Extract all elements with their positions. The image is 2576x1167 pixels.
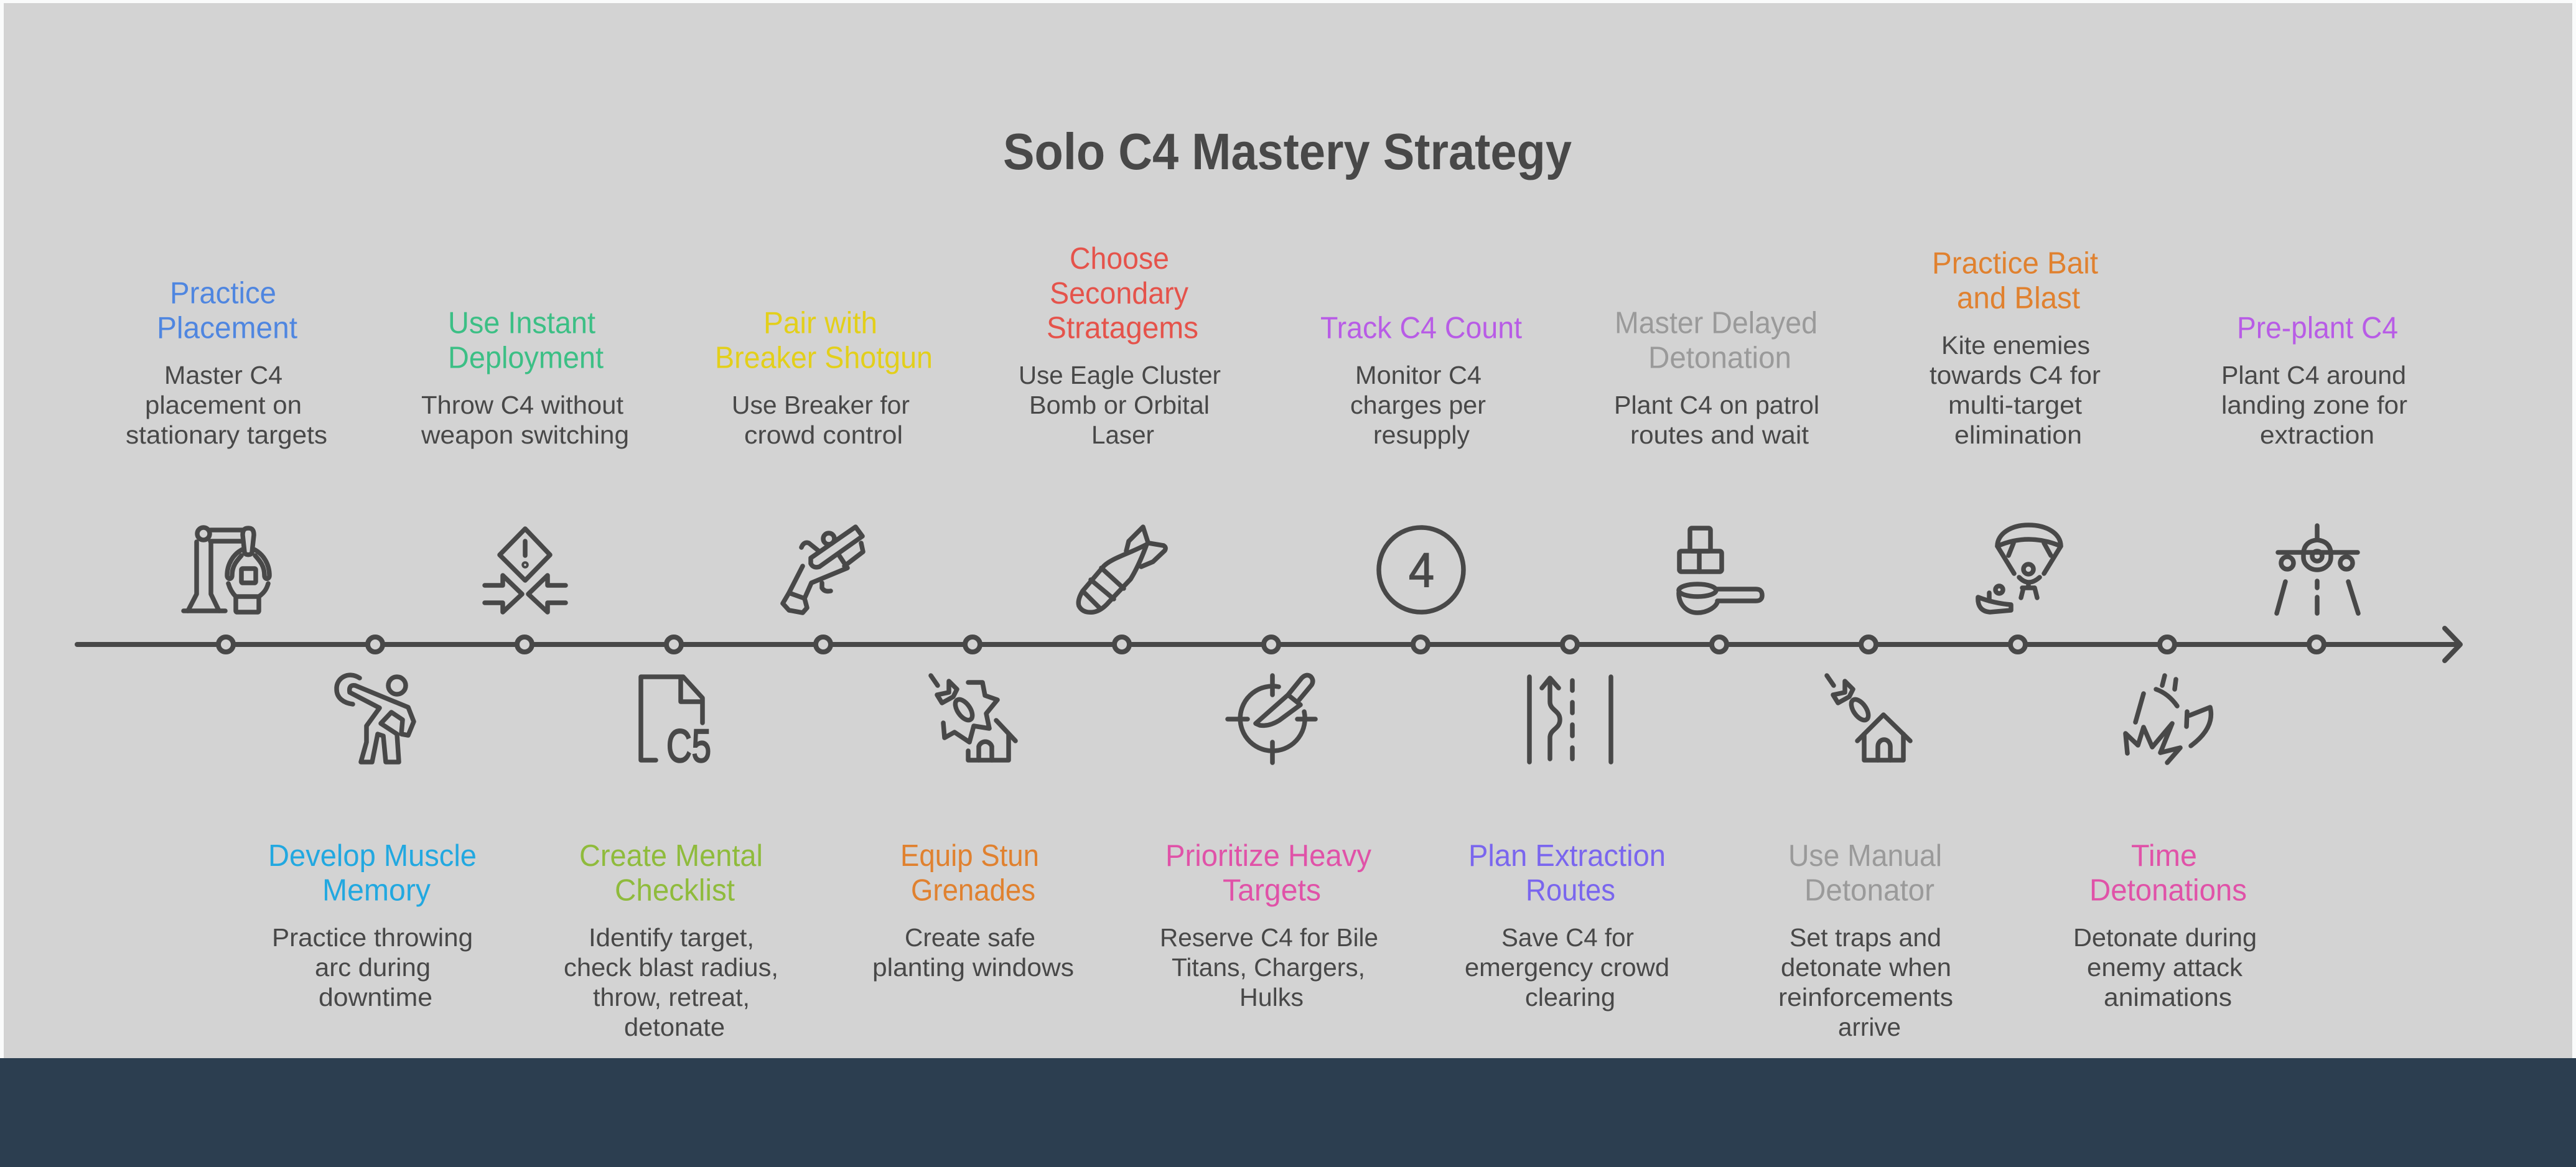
description: Equip Stun Grenades: planting windows: [872, 953, 1074, 982]
icon: circled number 4: [1379, 528, 1463, 612]
description: Create Mental Checklist: check blast radius,: [564, 953, 778, 982]
description: Time Detonations: enemy attack: [2087, 953, 2243, 982]
description: Practice Placement: Master C4: [164, 361, 282, 389]
heading: Plan Extraction Routes: Routes: [1526, 873, 1615, 907]
description: Pre-plant C4: Plant C4 around: [2221, 361, 2406, 389]
icon: C5 document: [641, 677, 711, 772]
heading: Prioritize Heavy Targets: Targets: [1223, 873, 1321, 907]
step: Practice Placement: [126, 276, 327, 612]
heading: Use Instant Deployment: Deployment: [448, 341, 604, 374]
heading: Use Manual Detonator: Detonator: [1804, 873, 1934, 907]
step: Pre-plant C4: [2221, 311, 2407, 613]
heading: Pre-plant C4: Pre-plant C4: [2237, 311, 2398, 345]
heading: Equip Stun Grenades: Equip Stun: [900, 839, 1039, 873]
description: Use Instant Deployment: weapon switching: [421, 421, 629, 449]
step: Prioritize Heavy Targets: [1160, 675, 1378, 1011]
icon: bomb over house: [1827, 676, 1910, 760]
description: Pre-plant C4: landing zone for: [2221, 391, 2407, 419]
heading: Master Delayed Detonation: Master Delayed: [1615, 306, 1818, 340]
heading: Time Detonations: Detonations: [2089, 873, 2247, 907]
description: Equip Stun Grenades: [872, 923, 1074, 982]
heading: Pair with Breaker Shotgun: [715, 306, 933, 374]
icon: aerial bomb: [1078, 527, 1165, 612]
heading: Prioritize Heavy Targets: Prioritize Heavy: [1165, 839, 1371, 873]
heading: Practice Placement: [157, 276, 297, 345]
title: Solo C4 Mastery Strategy: [1003, 123, 1572, 180]
heading: Use Instant Deployment: Use Instant: [448, 306, 595, 340]
description: Prioritize Heavy Targets: Reserve C4 for Bile: [1160, 923, 1378, 952]
icon: bomb burst on house: [931, 676, 1015, 760]
description: Pair with Breaker Shotgun: crowd control: [744, 421, 903, 449]
icon: explosion and claw: [2126, 676, 2211, 763]
description: Practice Bait and Blast: elimination: [1954, 421, 2082, 449]
icon: warning diamond with converging arrows: [485, 529, 566, 612]
description: Practice Bait and Blast: Kite enemies: [1941, 331, 2090, 360]
description: Pair with Breaker Shotgun: Use Breaker for: [732, 391, 910, 419]
description: Pre-plant C4: extraction: [2260, 421, 2374, 449]
description: Create Mental Checklist: throw, retreat,: [593, 983, 750, 1011]
step: Choose Secondary Stratagems: [1019, 242, 1221, 612]
step: Master Delayed Detonation: [1614, 306, 1819, 613]
description: Practice Bait and Blast: multi-target: [1948, 391, 2083, 419]
step: Plan Extraction Routes: [1465, 677, 1669, 1011]
heading: Equip Stun Grenades: Grenades: [911, 873, 1035, 907]
description: Track C4 Count: charges per: [1350, 391, 1486, 419]
description: Plan Extraction Routes: clearing: [1525, 983, 1615, 1011]
heading: Pair with Breaker Shotgun: Pair with: [763, 306, 877, 340]
icon: robot arm: [184, 528, 269, 612]
description: Master Delayed Detonation: routes and wait: [1630, 421, 1809, 449]
description: Choose Secondary Stratagems: Laser: [1091, 421, 1154, 449]
icon: road with route arrow: [1529, 677, 1611, 762]
icon: aircraft over runway: [2277, 526, 2358, 613]
description: Use Manual Detonator: reinforcements: [1778, 983, 1953, 1011]
description: Time Detonations: Detonate during: [2073, 923, 2257, 952]
heading: Track C4 Count: Track C4 Count: [1320, 311, 1522, 345]
description: Prioritize Heavy Targets: Hulks: [1239, 983, 1304, 1011]
step: Practice Bait and Blast: [1930, 246, 2101, 612]
heading: Use Manual Detonator: Use Manual: [1788, 839, 1942, 873]
heading: Develop Muscle Memory: [268, 839, 477, 907]
heading: Equip Stun Grenades: [900, 839, 1039, 907]
description: Prioritize Heavy Targets: Titans, Chargers,: [1172, 953, 1365, 982]
heading: Create Mental Checklist: Checklist: [615, 873, 735, 907]
description: Choose Secondary Stratagems: Use Eagle Cluster: [1019, 361, 1221, 389]
timeline axis with nodes and arrow: [77, 628, 2460, 661]
description: Use Instant Deployment: Throw C4 without: [421, 391, 624, 419]
heading: Create Mental Checklist: [579, 839, 763, 907]
description: Practice Bait and Blast: towards C4 for: [1930, 361, 2101, 389]
footer band: [0, 1058, 2576, 1167]
heading: Time Detonations: Time: [2131, 839, 2197, 873]
description: Master Delayed Detonation: [1614, 391, 1819, 449]
heading: Choose Secondary Stratagems: [1047, 242, 1198, 345]
heading: Use Instant Deployment: [448, 306, 604, 374]
description: Create Mental Checklist: [564, 923, 778, 1041]
description: Use Manual Detonator: [1778, 923, 1953, 1041]
description: Master Delayed Detonation: Plant C4 on patrol: [1614, 391, 1819, 419]
description: Create Mental Checklist: detonate: [624, 1013, 725, 1041]
icon: parachute and boat: [1978, 525, 2061, 612]
description: Practice Placement: stationary targets: [126, 421, 327, 449]
description: Practice Placement: [126, 361, 327, 449]
heading: Use Manual Detonator: [1788, 839, 1942, 907]
description: Plan Extraction Routes: emergency crowd: [1465, 953, 1669, 982]
description: Plan Extraction Routes: Save C4 for: [1501, 923, 1634, 952]
step: Pair with Breaker Shotgun: [715, 306, 933, 613]
description: Use Manual Detonator: detonate when: [1781, 953, 1951, 982]
description: Prioritize Heavy Targets: [1160, 923, 1378, 1011]
heading: Develop Muscle Memory: Develop Muscle: [268, 839, 477, 873]
step: Use Instant Deployment: [421, 306, 629, 612]
heading: Choose Secondary Stratagems: Secondary: [1050, 277, 1188, 310]
icon: shotgun: [783, 527, 863, 613]
heading: Create Mental Checklist: Create Mental: [579, 839, 763, 873]
heading: Choose Secondary Stratagems: Stratagems: [1047, 311, 1198, 345]
heading: Develop Muscle Memory: Memory: [322, 873, 431, 907]
description: Plan Extraction Routes: [1465, 923, 1669, 1011]
icon: throwing figure: [337, 675, 414, 762]
heading: Master Delayed Detonation: [1615, 306, 1818, 374]
description: Develop Muscle Memory: [272, 923, 473, 1011]
description: Choose Secondary Stratagems: [1019, 361, 1221, 449]
description: Practice Bait and Blast: [1930, 331, 2101, 449]
description: Time Detonations: animations: [2104, 983, 2232, 1011]
icon: stacked boxes and pan: [1679, 528, 1762, 613]
description: Time Detonations: [2073, 923, 2257, 1011]
description: Develop Muscle Memory: downtime: [319, 983, 432, 1011]
description: Track C4 Count: [1350, 361, 1486, 449]
heading: Practice Placement: Placement: [157, 311, 297, 345]
heading: Master Delayed Detonation: Detonation: [1648, 341, 1791, 374]
step: Track C4 Count: [1320, 311, 1522, 612]
description: Pair with Breaker Shotgun: [732, 391, 910, 449]
step: Create Mental Checklist: [564, 677, 778, 1041]
heading: Practice Bait and Blast: [1932, 246, 2098, 315]
description: Create Mental Checklist: Identify target,: [589, 923, 754, 952]
description: Pre-plant C4: [2221, 361, 2407, 449]
description: Use Manual Detonator: arrive: [1838, 1013, 1901, 1041]
description: Track C4 Count: Monitor C4: [1355, 361, 1482, 389]
icon: C5 document: C5: [666, 720, 711, 772]
heading: Practice Bait and Blast: Practice Bait: [1932, 246, 2098, 280]
description: Use Manual Detonator: Set traps and: [1790, 923, 1941, 952]
description: Choose Secondary Stratagems: Bomb or Orbital: [1029, 391, 1210, 419]
heading: Pair with Breaker Shotgun: Breaker Shotgun: [715, 341, 933, 374]
heading: Plan Extraction Routes: [1468, 839, 1666, 907]
description: Use Instant Deployment: [421, 391, 629, 449]
heading: Practice Bait and Blast: and Blast: [1957, 281, 2080, 315]
icon: crosshair with knife: [1228, 675, 1315, 763]
heading: Time Detonations: [2089, 839, 2247, 907]
step: Equip Stun Grenades: [872, 676, 1074, 982]
step: Time Detonations: [2073, 676, 2257, 1011]
icon: circled number 4: 4: [1409, 542, 1434, 597]
heading: Practice Placement: Practice: [170, 276, 276, 310]
description: Equip Stun Grenades: Create safe: [905, 923, 1035, 952]
heading: Plan Extraction Routes: Plan Extraction: [1468, 839, 1666, 873]
step: Use Manual Detonator: [1778, 676, 1953, 1041]
description: Track C4 Count: resupply: [1373, 421, 1470, 449]
heading: Prioritize Heavy Targets: [1165, 839, 1371, 907]
step: Develop Muscle Memory: [268, 675, 477, 1011]
description: Develop Muscle Memory: Practice throwing: [272, 923, 473, 952]
description: Practice Placement: placement on: [145, 391, 302, 419]
heading: Choose Secondary Stratagems: Choose: [1070, 242, 1169, 276]
description: Develop Muscle Memory: arc during: [315, 953, 431, 982]
